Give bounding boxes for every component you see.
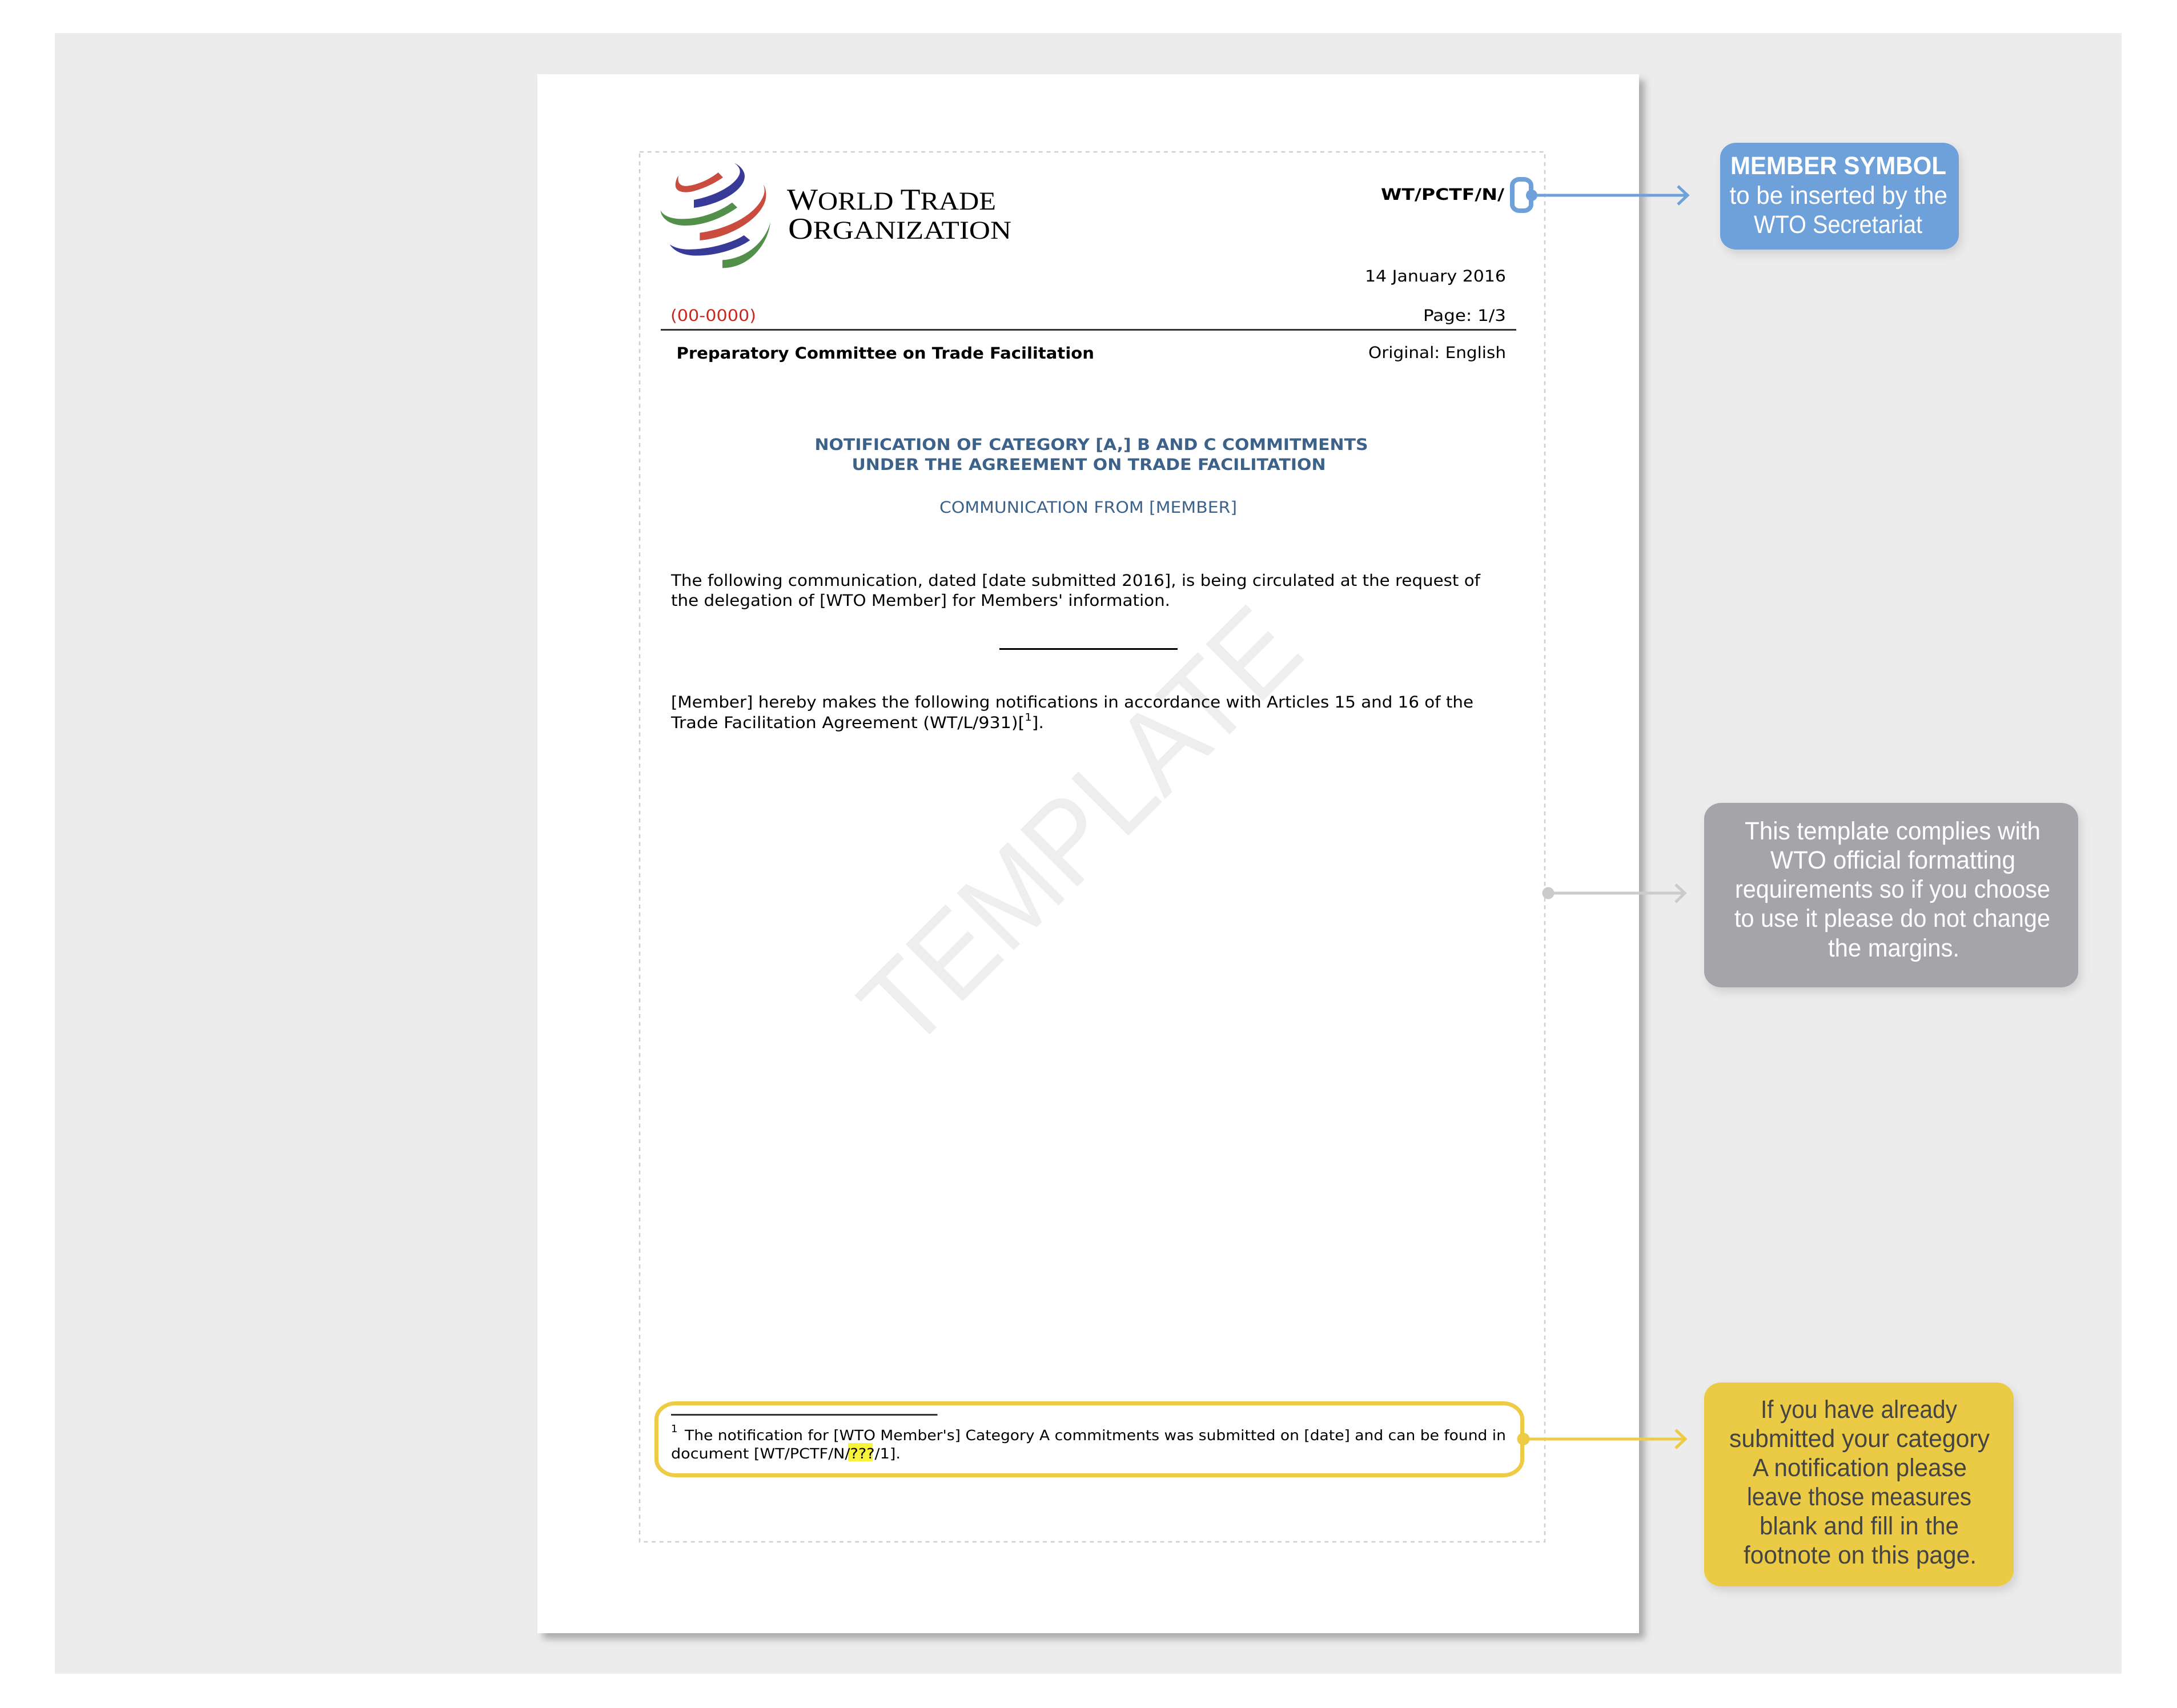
arrow: blue, member symbol [1526, 186, 1688, 204]
callout: member symbol [1720, 143, 1959, 250]
yellow footnote outline [657, 1404, 1523, 1476]
callout: formatting requirements: requirements so if you choose [1735, 875, 2050, 903]
callout: category A footnote: leave those measures [1747, 1483, 1971, 1511]
footnote text: document [WT/PCTF/N/???/1]. [671, 1445, 901, 1462]
paragraph 2 [670, 693, 1473, 732]
blue bracket around symbol [1512, 179, 1531, 211]
page number: Page: 1/3 [1423, 306, 1506, 325]
document symbol: WT/PCTF/N/ [1381, 185, 1505, 204]
arrow: grey, margins [1542, 885, 1685, 902]
callout: category A footnote [1704, 1383, 2014, 1586]
callout: category A footnote: footnote on this page. [1744, 1541, 1977, 1569]
footnote text: The notification for [WTO Member's] Category A commitments was submitted on [date] and can be found in [684, 1427, 1506, 1444]
paragraph 2: 1 [1025, 712, 1032, 724]
paragraph 1 [670, 571, 1481, 610]
subtitle: COMMUNICATION FROM [MEMBER] [939, 498, 1237, 517]
document page [537, 74, 1639, 1633]
callout: member symbol: to be inserted by the [1729, 182, 1947, 210]
paragraph 1: the delegation of [WTO Member] for Members' information. [671, 591, 1170, 610]
callout: member symbol: WTO Secretariat [1754, 211, 1922, 239]
date: 14 January 2016 [1365, 267, 1506, 286]
logo wordmark: ORGANIZATION [788, 212, 1011, 246]
callout: category A footnote: blank and fill in the [1760, 1512, 1959, 1540]
callout: formatting requirements: This template complies with [1745, 817, 2041, 845]
callout: formatting requirements: the margins. [1828, 934, 1959, 962]
arrow: yellow, footnote [1517, 1430, 1685, 1448]
highlight on question marks [848, 1443, 873, 1461]
callout: member symbol: MEMBER SYMBOL [1730, 152, 1946, 180]
document title: UNDER THE AGREEMENT ON TRADE FACILITATION [852, 455, 1326, 474]
callout: formatting requirements: to use it please do not change [1734, 905, 2050, 933]
paragraph 2: ]. [1032, 713, 1044, 732]
separator line [999, 648, 1178, 650]
document number: (00-0000) [670, 306, 756, 325]
paragraph 2: Trade Facilitation Agreement (WT/L/931)[ [671, 713, 1000, 732]
footnote rule [671, 1414, 938, 1416]
document title: NOTIFICATION OF CATEGORY [A,] B AND C COMMITMENTS [814, 435, 1368, 454]
paragraph 2: [Member] hereby makes the following notifications in accordance with Articles 15 and 16 of the [671, 693, 1473, 712]
original language: Original: English [1368, 343, 1506, 362]
paragraph 1: The following communication, dated [date submitted 2016], is being circulated at the request of [670, 571, 1481, 590]
callout: category A footnote: If you have already [1761, 1396, 1957, 1424]
footnote block [657, 1404, 1523, 1476]
header rule [661, 329, 1516, 331]
callout: formatting requirements [1704, 803, 2078, 987]
margin guide: dashed box [640, 152, 1545, 1542]
document title [814, 435, 1368, 474]
footnote text [671, 1427, 1506, 1462]
committee name: Preparatory Committee on Trade Facilitation [676, 344, 1094, 363]
callout: category A footnote: submitted your category [1729, 1425, 1990, 1453]
watermark: TEMPLATE: TEMPLATE [835, 582, 1326, 1072]
callout: formatting requirements: WTO official formatting [1770, 846, 2015, 874]
footnote marker: 1 [671, 1423, 677, 1435]
callout: category A footnote: A notification please [1753, 1454, 1967, 1482]
logo wordmark: WORLD TRADE [787, 183, 996, 216]
logo wordmark [787, 183, 1011, 246]
icon: WTO logo [661, 163, 770, 268]
